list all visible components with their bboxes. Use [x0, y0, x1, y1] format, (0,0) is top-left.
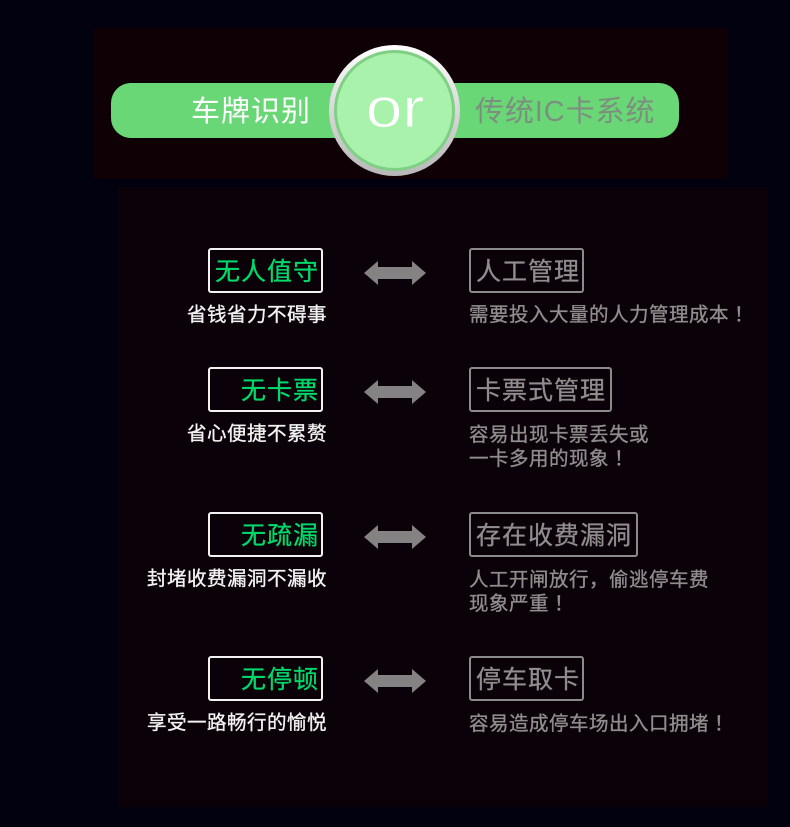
row 1 right text: 需要投入大量的人力管理成本 ！ — [469, 304, 754, 326]
row 3 right text: 现象严重 ！ — [469, 593, 574, 615]
inner green disc — [334, 50, 455, 171]
row 3 right text: 人工开闸放行，偷逃停车费 — [469, 569, 709, 591]
row 4 left badge: 无停顿 — [241, 666, 319, 694]
row 3 left badge: 无疏漏 — [241, 522, 319, 550]
or circle badge — [329, 45, 460, 176]
row 2 right text: 一卡多用的现象 ！ — [469, 448, 634, 470]
row 2 left badge — [208, 367, 323, 412]
row 3 right text — [469, 569, 709, 615]
row 2 right text: 容易出现卡票丢失或 — [469, 424, 649, 446]
row 4 arrow — [364, 669, 426, 693]
or label: or — [366, 76, 424, 139]
row 2 right badge: 卡票式管理 — [476, 377, 606, 405]
row 1 right badge — [469, 248, 584, 293]
row 1 left text: 省钱省力不碍事 — [187, 304, 327, 326]
row 2 right text — [469, 424, 649, 470]
row 3 left badge — [208, 512, 323, 557]
heading: 车牌识别: 车牌识别 — [191, 96, 311, 128]
row 4 right text: 容易造成停车场出入口拥堵 ！ — [469, 713, 734, 735]
row 3 right badge: 存在收费漏洞 — [476, 522, 632, 550]
row 2 left badge: 无卡票 — [241, 377, 319, 405]
row 4 left badge — [208, 656, 323, 701]
heading: 传统IC卡系统: 传统IC卡系统 — [475, 96, 655, 128]
header panel — [94, 28, 728, 179]
row 4 right badge: 停车取卡 — [476, 666, 580, 694]
row 3 arrow — [364, 525, 426, 549]
row 1 left badge — [208, 248, 323, 293]
row 2 left text: 省心便捷不累赘 — [187, 423, 327, 445]
row 1 arrow — [364, 261, 426, 285]
row 4 left text: 享受一路畅行的愉悦 — [147, 712, 327, 734]
row 1 left badge: 无人值守 — [215, 258, 319, 286]
row 2 right badge — [469, 367, 612, 412]
row 2 arrow — [364, 380, 426, 404]
row 4 right badge — [469, 656, 584, 701]
row 1 right badge: 人工管理 — [476, 258, 580, 286]
content panel — [118, 187, 768, 807]
row 3 right badge — [469, 512, 638, 557]
row 3 left text: 封堵收费漏洞不漏收 — [147, 568, 327, 590]
header pill: comparison bar — [111, 83, 679, 138]
